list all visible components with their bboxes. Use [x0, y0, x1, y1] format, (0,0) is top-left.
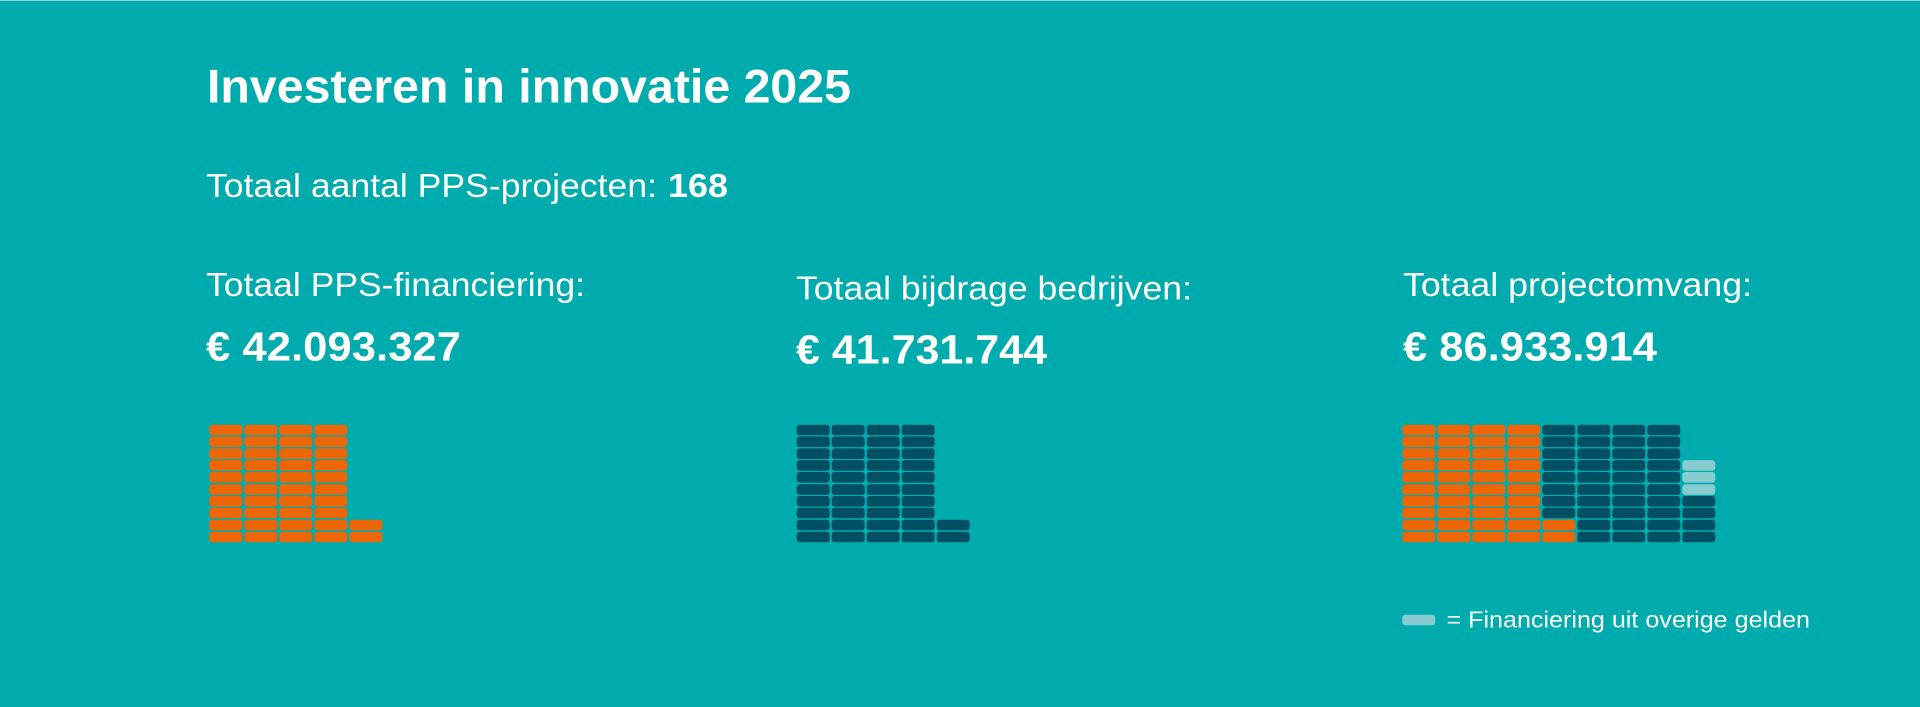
value: projectomvang: € 86.933.914 [1403, 324, 1658, 370]
total projects line: 168 [668, 168, 728, 205]
panel: PPS-financiering [206, 267, 585, 542]
title: Investeren in innovatie 2025 [207, 60, 851, 113]
label: projectomvang: Totaal projectomvang: [1403, 267, 1752, 304]
dark units [1542, 425, 1715, 542]
value: bijdrage bedrijven: € 41.731.744 [796, 326, 1047, 372]
legend swatch [1402, 615, 1435, 625]
value: PPS-financiering: € 42.093.327 [206, 324, 461, 370]
unit chart: projectomvang [1402, 425, 1715, 542]
unit chart: PPS-financiering [209, 425, 382, 542]
legend text: = Financiering uit overige gelden [1446, 606, 1810, 632]
legend [1402, 606, 1810, 632]
total projects line: Totaal aantal PPS-projecten: [206, 168, 657, 205]
panel: projectomvang [1402, 267, 1752, 542]
label: PPS-financiering: Totaal PPS-financiering: [206, 267, 585, 304]
panel: bijdrage bedrijven [796, 270, 1192, 542]
orange units [1402, 425, 1575, 542]
label: bijdrage bedrijven: Totaal bijdrage bedrijven: [796, 270, 1192, 307]
light units [1682, 460, 1715, 495]
unit chart: bijdrage bedrijven [797, 425, 970, 542]
